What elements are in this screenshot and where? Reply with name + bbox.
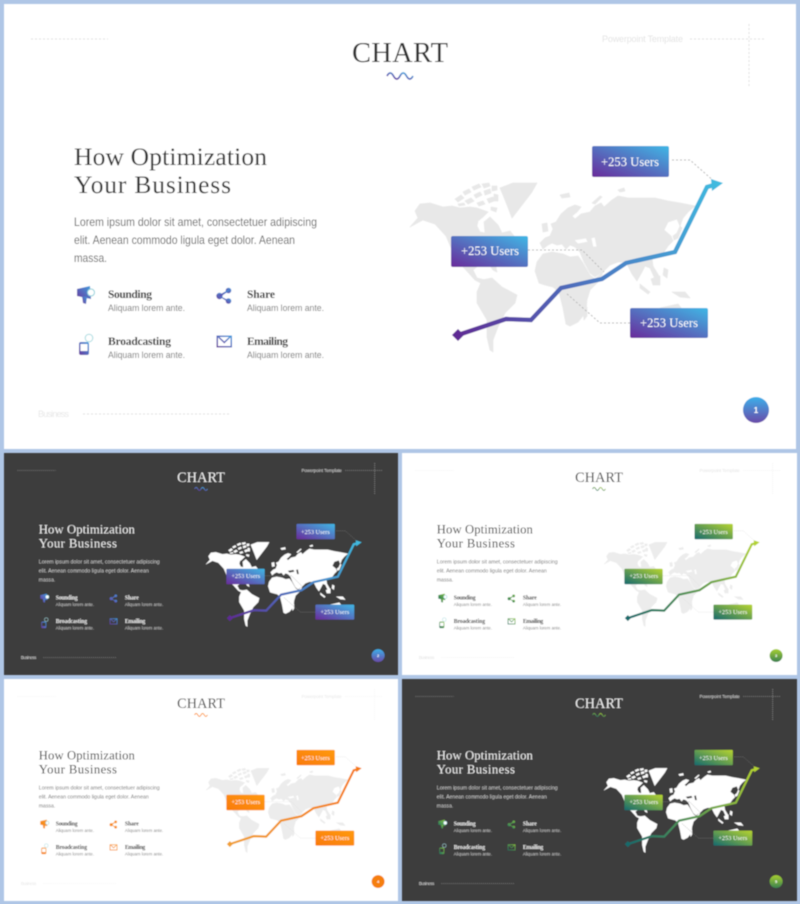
body text	[39, 560, 160, 584]
callout left: +253 Users	[461, 244, 519, 258]
callout top	[297, 750, 335, 765]
callout top: +253 Users	[699, 529, 728, 536]
item: emailing	[523, 845, 561, 857]
item: share: Aliquam lorem ante.	[125, 602, 163, 607]
item: emailing: Aliquam lorem ante.	[125, 626, 163, 631]
world map	[604, 542, 746, 627]
title wave	[195, 713, 207, 716]
item: sounding	[454, 596, 492, 607]
title wave	[593, 713, 605, 716]
callout top	[695, 524, 733, 539]
callout top: +253 Users	[301, 529, 330, 536]
icon: megaphone	[40, 820, 49, 829]
item: sounding: Sounding	[56, 596, 78, 602]
footer dashes	[43, 657, 116, 659]
icon: megaphone	[438, 594, 447, 603]
body text: elit. Aenean commodo ligula eget dolor. Aenean	[39, 569, 149, 575]
header right cross dashes	[743, 463, 781, 494]
icon: share	[110, 595, 117, 603]
body text: massa.	[39, 578, 56, 584]
item: broadcasting: Aliquam lorem ante.	[454, 626, 492, 631]
trend line markers	[452, 179, 723, 341]
item: share	[247, 289, 324, 313]
slide background	[402, 453, 797, 675]
callout top	[695, 750, 733, 765]
item: emailing: Emailing	[125, 845, 145, 851]
callout left: +253 Users	[231, 573, 261, 580]
callout top	[297, 524, 335, 539]
body text: massa.	[74, 251, 107, 265]
connector lines	[528, 160, 716, 323]
heading: Your Business	[437, 762, 515, 776]
connector lines	[265, 757, 358, 838]
callout right	[315, 605, 354, 620]
item: sounding: Aliquam lorem ante.	[56, 602, 94, 607]
world map	[604, 768, 746, 853]
heading: How Optimization	[437, 522, 533, 536]
body text: massa.	[39, 804, 56, 810]
icon: phone	[41, 618, 48, 628]
header template label: Powerpoint Template	[301, 468, 342, 473]
header template label: Powerpoint Template	[602, 34, 683, 44]
icon: megaphone	[77, 286, 94, 304]
body text: massa.	[437, 804, 454, 810]
connector lines	[663, 757, 756, 838]
trend line markers	[227, 766, 362, 847]
slide background	[4, 453, 398, 675]
world map	[410, 183, 695, 352]
callout right	[713, 605, 752, 620]
callout right: +253 Users	[640, 316, 698, 330]
callout right	[630, 308, 708, 338]
connector lines	[663, 531, 756, 612]
footer label: Business	[21, 881, 37, 886]
body text	[437, 786, 558, 810]
callout left	[226, 569, 265, 584]
icon: share	[216, 288, 231, 304]
heading: How Optimization	[437, 748, 533, 762]
heading: How Optimization	[39, 522, 135, 536]
item: broadcasting	[56, 619, 94, 631]
heading: Your Business	[437, 536, 515, 550]
trend line	[628, 543, 755, 618]
header left dashes	[17, 469, 56, 471]
item: broadcasting: Aliquam lorem ante.	[56, 626, 94, 631]
body text: massa.	[437, 578, 454, 584]
item: share: Aliquam lorem ante.	[523, 828, 561, 833]
page number badge	[372, 649, 385, 662]
world map	[206, 542, 348, 627]
item: emailing: Aliquam lorem ante.	[247, 350, 324, 360]
page number badge	[770, 875, 783, 888]
item: broadcasting	[454, 619, 492, 631]
item: sounding: Sounding	[56, 822, 78, 828]
callout left: +253 Users	[629, 573, 659, 580]
item: sounding	[56, 822, 94, 833]
title: CHART	[177, 696, 225, 712]
icon: share	[508, 595, 515, 603]
callout right: +253 Users	[320, 609, 350, 616]
icon: envelope	[508, 844, 515, 850]
item: sounding	[108, 289, 185, 313]
item: broadcasting: Aliquam lorem ante.	[108, 350, 185, 360]
callout top	[592, 146, 669, 177]
item: broadcasting: Broadcasting	[108, 336, 171, 348]
item: broadcasting: Broadcasting	[56, 845, 87, 851]
header template label: Powerpoint Template	[699, 694, 740, 699]
page number badge: 1	[754, 406, 759, 415]
header left dashes	[415, 695, 454, 697]
icon: megaphone	[40, 594, 49, 603]
item: broadcasting: Broadcasting	[454, 845, 485, 851]
item: emailing	[125, 619, 163, 631]
callout top: +253 Users	[301, 755, 330, 762]
title wave	[387, 73, 413, 79]
item: sounding	[454, 822, 492, 833]
footer label: Business	[419, 655, 435, 660]
title: CHART	[575, 696, 623, 712]
item: share	[523, 596, 561, 607]
callout top: +253 Users	[601, 155, 659, 169]
item: emailing	[247, 336, 324, 360]
item: share	[125, 596, 163, 607]
title wave	[593, 487, 605, 490]
panel: small dark green slide	[402, 679, 797, 901]
item: emailing: Emailing	[523, 619, 543, 625]
item: broadcasting	[108, 336, 185, 360]
item: emailing: Aliquam lorem ante.	[523, 852, 561, 857]
item: emailing: Emailing	[125, 619, 145, 625]
body text: elit. Aenean commodo ligula eget dolor. Aenean	[39, 795, 149, 801]
footer dashes	[83, 413, 229, 415]
page number badge: 3	[775, 653, 778, 658]
callout left: +253 Users	[629, 799, 659, 806]
item: emailing	[125, 845, 163, 857]
item: sounding: Sounding	[454, 822, 476, 828]
icon: phone	[439, 844, 446, 854]
trend line	[628, 769, 755, 844]
header left dashes	[17, 695, 56, 697]
icon: phone	[79, 334, 93, 355]
item: broadcasting	[56, 845, 94, 857]
item: share: Share	[125, 822, 139, 828]
callout right: +253 Users	[320, 835, 350, 842]
body text	[74, 215, 317, 265]
heading	[74, 142, 267, 199]
item: emailing: Emailing	[247, 336, 288, 348]
item: sounding: Sounding	[454, 596, 476, 602]
panel: small light orange slide	[4, 679, 398, 901]
item: share: Aliquam lorem ante.	[523, 602, 561, 607]
page number badge: 5	[775, 879, 778, 884]
slide background	[4, 4, 796, 449]
icon: envelope	[110, 844, 117, 850]
body text: elit. Aenean commodo ligula eget dolor. Aenean	[74, 233, 295, 247]
item: emailing	[523, 619, 561, 631]
page number badge	[743, 397, 769, 423]
item: share: Aliquam lorem ante.	[247, 303, 324, 313]
body text: Lorem ipsum dolor sit amet, consectetuer adipiscing	[437, 786, 558, 792]
body text: Lorem ipsum dolor sit amet, consectetuer adipiscing	[39, 560, 160, 566]
heading	[39, 748, 135, 776]
header right cross dashes	[345, 689, 383, 720]
item: share: Share	[125, 596, 139, 602]
footer label: Business	[419, 881, 435, 886]
heading: Your Business	[39, 762, 117, 776]
item: broadcasting: Broadcasting	[56, 619, 87, 625]
item: sounding: Aliquam lorem ante.	[56, 828, 94, 833]
slide background	[4, 679, 398, 901]
callout left	[624, 569, 663, 584]
item: emailing: Aliquam lorem ante.	[125, 852, 163, 857]
body text: Lorem ipsum dolor sit amet, consectetuer adipiscing	[39, 786, 160, 792]
item: share	[523, 822, 561, 833]
item: sounding	[56, 596, 94, 607]
item: sounding: Aliquam lorem ante.	[454, 828, 492, 833]
item: broadcasting: Aliquam lorem ante.	[56, 852, 94, 857]
callout left	[226, 795, 265, 810]
item: broadcasting: Aliquam lorem ante.	[454, 852, 492, 857]
item: sounding: Sounding	[108, 289, 152, 301]
page number badge: 2	[377, 653, 380, 658]
heading	[39, 522, 135, 550]
header right cross dashes	[743, 689, 781, 720]
item: share: Aliquam lorem ante.	[125, 828, 163, 833]
page number badge: 4	[377, 879, 380, 884]
trend line	[230, 769, 357, 844]
heading: Your Business	[74, 170, 231, 199]
callout top: +253 Users	[699, 755, 728, 762]
connector lines	[265, 531, 358, 612]
body text: elit. Aenean commodo ligula eget dolor. Aenean	[437, 795, 547, 801]
callout left	[624, 795, 663, 810]
icon: envelope	[110, 618, 117, 624]
item: share	[125, 822, 163, 833]
trend line	[230, 543, 357, 618]
header left dashes	[415, 469, 454, 471]
icon: megaphone	[438, 820, 447, 829]
callout left	[451, 236, 528, 267]
heading: How Optimization	[39, 748, 135, 762]
callout right	[713, 831, 752, 846]
panel: small light green slide	[402, 453, 797, 675]
item: emailing: Emailing	[523, 845, 543, 851]
heading	[437, 748, 533, 776]
title: CHART	[177, 470, 225, 486]
item: share: Share	[523, 822, 537, 828]
footer dashes	[441, 883, 514, 885]
item: share: Share	[523, 596, 537, 602]
panel: large light blue-violet slide	[4, 4, 796, 449]
icon: share	[508, 821, 515, 829]
footer dashes	[441, 657, 514, 659]
header template label: Powerpoint Template	[699, 468, 740, 473]
header left dashes	[31, 38, 108, 40]
heading: Your Business	[39, 536, 117, 550]
icon: envelope	[508, 618, 515, 624]
item: emailing: Aliquam lorem ante.	[523, 626, 561, 631]
heading: How Optimization	[74, 142, 267, 171]
icon: phone	[41, 844, 48, 854]
title: CHART	[352, 38, 448, 69]
title: CHART	[575, 470, 623, 486]
body text	[437, 560, 558, 584]
page number badge	[770, 649, 783, 662]
trend line	[458, 185, 714, 335]
title wave	[195, 487, 207, 490]
icon: share	[110, 821, 117, 829]
page number badge	[372, 875, 385, 888]
callout right: +253 Users	[718, 835, 748, 842]
trend line markers	[625, 766, 760, 847]
footer label: Business	[21, 655, 37, 660]
item: share: Share	[247, 289, 275, 301]
item: sounding: Aliquam lorem ante.	[454, 602, 492, 607]
callout right: +253 Users	[718, 609, 748, 616]
trend line markers	[625, 540, 760, 621]
footer dashes	[43, 883, 116, 885]
slide background	[402, 679, 797, 901]
callout right	[315, 831, 354, 846]
body text: elit. Aenean commodo ligula eget dolor. Aenean	[437, 569, 547, 575]
heading	[437, 522, 533, 550]
callout left: +253 Users	[231, 799, 261, 806]
item: broadcasting: Broadcasting	[454, 619, 485, 625]
header right cross dashes	[690, 24, 766, 87]
header right cross dashes	[345, 463, 383, 494]
body text: Lorem ipsum dolor sit amet, consectetuer adipiscing	[437, 560, 558, 566]
world map	[206, 768, 348, 853]
header template label: Powerpoint Template	[301, 694, 342, 699]
item: broadcasting	[454, 845, 492, 857]
item: sounding: Aliquam lorem ante.	[108, 303, 185, 313]
body text: Lorem ipsum dolor sit amet, consectetuer adipiscing	[74, 215, 317, 229]
footer label: Business	[38, 409, 70, 419]
panel: small dark blue-violet slide	[4, 453, 398, 675]
icon: phone	[439, 618, 446, 628]
trend line markers	[227, 540, 362, 621]
icon: envelope	[216, 336, 232, 348]
body text	[39, 786, 160, 810]
